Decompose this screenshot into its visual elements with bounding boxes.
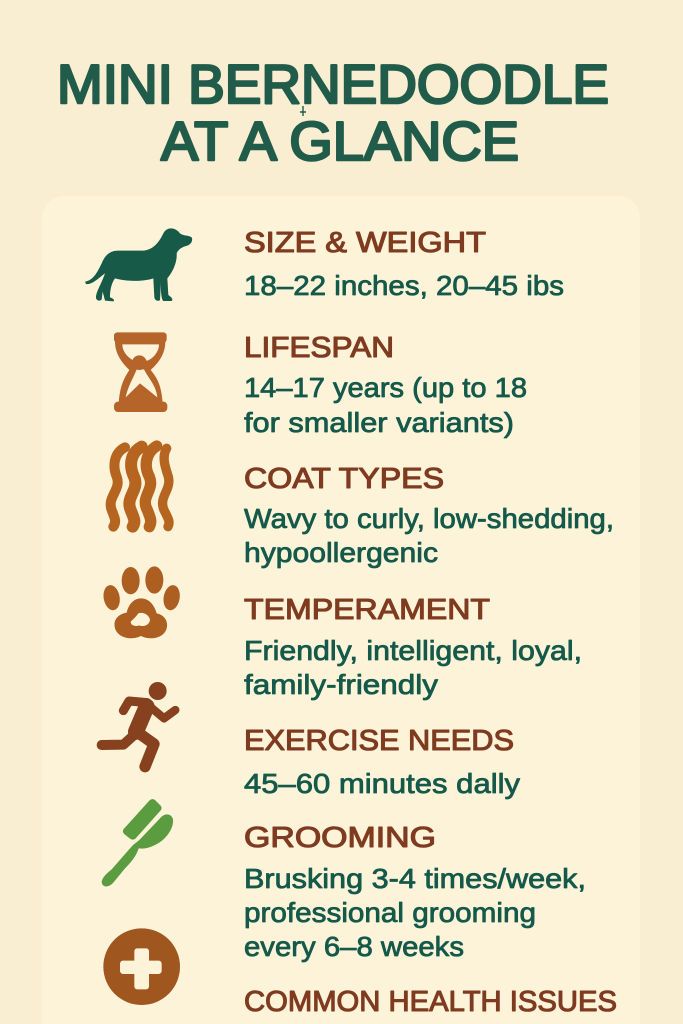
text: size and weight: SIZE & WEIGHT [244, 227, 486, 259]
panel: facts card [42, 196, 640, 1024]
icon: grooming brush [102, 799, 173, 886]
text: lifespan: LIFESPAN [244, 332, 394, 364]
text: coat types: Wavy to curly, low-shedding, [244, 503, 614, 534]
text: coat types: COAT TYPES [244, 463, 444, 495]
text: coat types: hypoollergenic [244, 537, 438, 568]
text: coat types [244, 463, 614, 568]
text: lifespan: for smaller variants) [244, 407, 514, 438]
text: temperament [244, 594, 582, 700]
text: temperament: Friendly, intelligent, loyal, [244, 635, 582, 666]
text: size and weight [244, 227, 564, 301]
icon: running figure [102, 682, 175, 767]
text: common health issues: COMMON HEALTH ISSUES [244, 986, 617, 1018]
icon: hourglass [114, 332, 167, 412]
title: MINI BERNEDOODLE [57, 53, 609, 115]
text: exercise needs: 45–60 minutes dally [244, 768, 520, 799]
text: temperament: family-friendly [244, 669, 438, 700]
text: grooming: professional grooming [244, 897, 536, 928]
text: grooming: Brusking 3-4 times/week, [244, 863, 586, 894]
icon: health cross [103, 928, 180, 1005]
title [57, 53, 609, 172]
text: lifespan [244, 332, 527, 438]
text: grooming [244, 822, 586, 962]
text: lifespan: 14–17 years (up to 18 [244, 372, 527, 403]
text: exercise needs: EXERCISE NEEDS [244, 725, 514, 757]
text: grooming: GROOMING [244, 822, 436, 854]
icon: dog silhouette [85, 228, 192, 301]
icon: wavy coat [111, 446, 169, 527]
text: exercise needs [244, 725, 520, 799]
title: AT A GLANCE [161, 110, 519, 172]
text: size and weight: 18–22 inches, 20–45 ibs [244, 270, 564, 301]
icon: paw print [102, 566, 182, 638]
text: grooming: every 6–8 weeks [244, 931, 464, 962]
text: temperament: TEMPERAMENT [244, 594, 490, 626]
